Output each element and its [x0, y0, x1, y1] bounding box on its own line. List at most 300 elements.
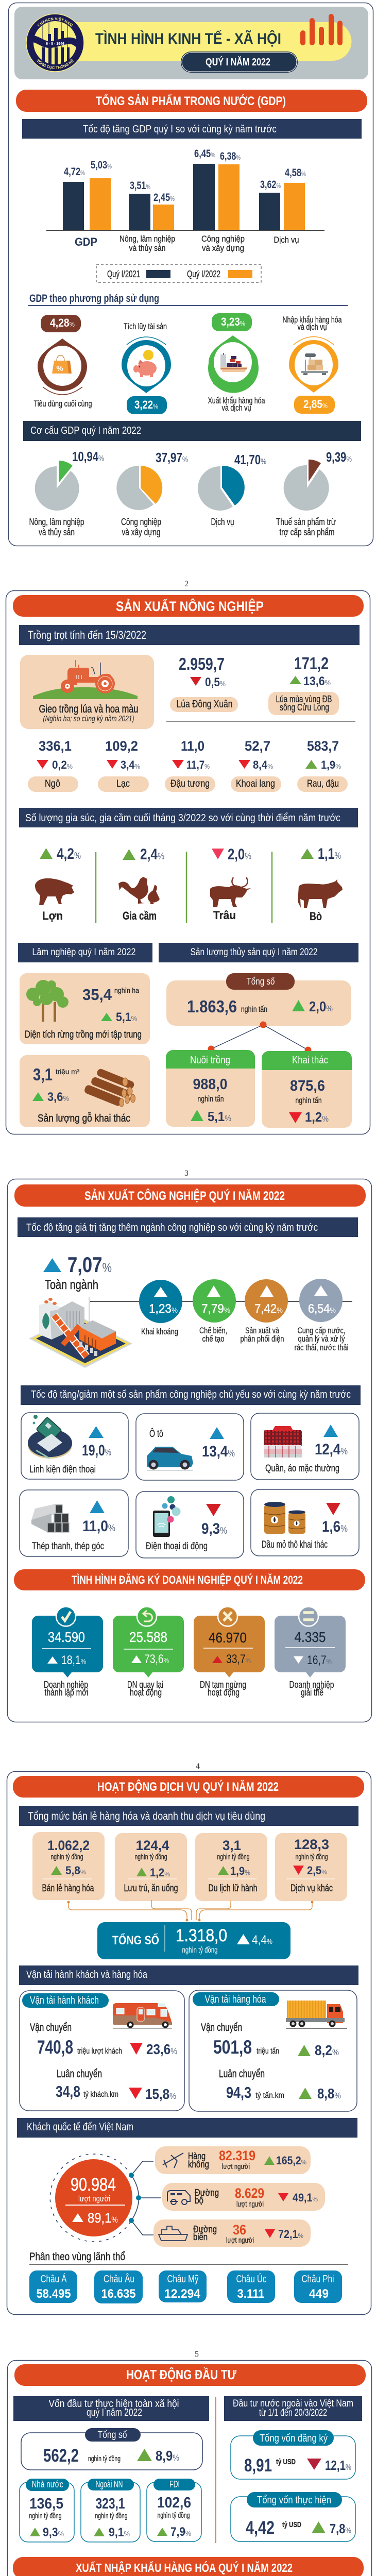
icon: oil barrels: [264, 1502, 305, 1534]
page number 5: 5: [195, 2350, 199, 2359]
pill: tổng vốn đăng ký: [253, 2430, 334, 2446]
card: nuôi trồng: nghìn tấn: [198, 1095, 224, 1104]
card: vận tải hành khách: 740,8: [37, 2037, 73, 2058]
pie: công nghiệp xây dựng 37,97%: Công nghiệp: [121, 517, 161, 527]
page number 4: 4: [196, 1762, 200, 1771]
card: châu Á: 58.495: [36, 2287, 71, 2301]
card: đường biển: [153, 2219, 311, 2247]
card: tổng số vốn đầu tư: nghìn tỷ đồng: [88, 2454, 121, 2463]
subheading: sản phẩm công nghiệp: [21, 1385, 361, 1405]
card: nuôi trồng: 988,0: [193, 1076, 228, 1093]
subheading: tốc độ tăng GDP: Tốc độ tăng GDP quý I so với cùng kỳ năm trước: [83, 124, 277, 135]
card: châu Mỹ: Châu Mỹ: [167, 2274, 199, 2285]
icon: phone components: [28, 1415, 72, 1459]
bar chart: tốc độ tăng GDP: 6,45%: [194, 148, 215, 160]
card: linh kiện điện thoại: 19,0%: [82, 1442, 111, 1459]
card: quần áo: [251, 1413, 359, 1480]
heading: hoạt động dịch vụ: HOẠT ĐỘNG DỊCH VỤ QUÝ I NĂM 2022: [97, 1780, 279, 1794]
stat: chế biến, chế tạo: 7,79%: [201, 1302, 230, 1316]
bar chart: tốc độ tăng GDP: và thủy sản: [129, 243, 166, 253]
subheading: vận tải: [19, 1965, 358, 1985]
card: tổng vốn thực hiện: tỷ USD: [282, 2520, 301, 2529]
pill: vận tải hàng hóa: Vận tải hàng hóa: [205, 1994, 266, 2005]
icon: cargo ship: [220, 353, 248, 372]
pie: thuế sản phẩm 9,39%: [276, 449, 352, 537]
card: đường hàng không: không: [188, 2159, 209, 2170]
card: doanh nghiệp giải thể: giải thể: [301, 1687, 323, 1698]
subheading: đầu tư nước ngoài: [224, 2396, 362, 2421]
card: lưu trú, ăn uống: nghìn tỷ đồng: [135, 1853, 167, 1861]
bar chart: tốc độ tăng GDP: và xây dựng: [202, 243, 244, 253]
icon: ship: [159, 2226, 187, 2241]
stat: lúa đông xuân: 0,5%: [205, 675, 226, 689]
stat: sản xuất và phân phối điện: phân phối điện: [240, 1334, 284, 1344]
card: vận tải hàng hóa: triệu tấn: [257, 2047, 279, 2056]
subheading: khách quốc tế: [17, 2118, 357, 2138]
subheading: tổng mức bán lẻ: Tổng mức bán lẻ hàng hóa và doanh thu dịch vụ tiêu dùng: [28, 1810, 265, 1822]
card: dầu mỏ: 1,6%: [322, 1518, 348, 1535]
icon: piggy bank: [133, 350, 157, 377]
pie: công nghiệp xây dựng 37,97%: 37,97%: [156, 450, 188, 465]
item: xuất khẩu hàng hóa và dịch vụ: [208, 313, 265, 413]
card: quần áo: 12,4%: [315, 1441, 348, 1458]
card: doanh nghiệp quay lại hoạt động: hoạt động: [130, 1687, 162, 1698]
card: doanh nghiệp tạm ngừng: DN tạm ngừng: [200, 1680, 246, 1690]
card: đường biển: lượt người: [226, 2236, 254, 2245]
card: doanh nghiệp giải thể: 16,7%: [307, 1653, 332, 1667]
item: nhập khẩu hàng hóa và dịch vụ: 2,85%: [303, 398, 328, 411]
card: du lịch lữ hành: Du lịch lữ hành: [208, 1883, 258, 1894]
stat: lúa mùa ĐBSCL: 13,6%: [303, 674, 331, 688]
card: rừng trồng mới: 5,1%: [116, 1010, 137, 1024]
item: xuất khẩu hàng hóa và dịch vụ: 3,23%: [221, 315, 245, 328]
card: ngoài nhà nước: nghìn tỷ đồng: [95, 2512, 128, 2520]
subheading: đầu tư nước ngoài: từ 1/1 đến 20/3/2022: [259, 2408, 327, 2418]
card: thép: [20, 1490, 128, 1556]
card: gỗ khai thác: triệu m³: [56, 1067, 79, 1076]
item: tích lũy tài sản: Tích lũy tài sản: [124, 321, 167, 331]
card: du lịch lữ hành: nghìn tỷ đồng: [217, 1853, 249, 1861]
card: du lịch lữ hành: 3,1: [223, 1838, 241, 1853]
subheading: cơ cấu GDP: [23, 421, 361, 441]
icon: shopping bag: [52, 355, 72, 374]
bar chart: tốc độ tăng GDP: 3,62%: [260, 179, 281, 191]
pie: nông lâm thủy sản 10,94%: [29, 449, 104, 537]
stat: ngô: 0,2%: [52, 758, 73, 771]
item: nhập khẩu hàng hóa và dịch vụ: Nhập khẩu hàng hóa: [282, 315, 342, 325]
header banner: [14, 7, 368, 79]
item: xuất khẩu hàng hóa và dịch vụ: Xuất khẩu hàng hóa: [208, 396, 265, 405]
icon: check mark: [62, 1612, 71, 1621]
card: dầu mỏ: [251, 1489, 359, 1556]
stat: lúa mùa ĐBSCL: 171,2: [294, 654, 329, 673]
card: du lịch lữ hành: 1,9%: [230, 1865, 250, 1877]
card: tổng vốn đăng ký: [231, 2430, 355, 2479]
card: vận tải hàng hóa: Luân chuyển: [219, 2068, 265, 2080]
card: gieo trồng: (Nghìn ha; so cùng kỳ năm 2021): [43, 715, 134, 723]
card: đường bộ: bộ: [195, 2195, 203, 2206]
chart: tổng khách quốc tế: lượt người: [78, 2194, 110, 2204]
card: đường bộ: Đường: [195, 2188, 219, 2198]
stat: lúa mùa ĐBSCL: Lúa mùa vùng ĐB: [276, 694, 332, 704]
card: linh kiện điện thoại: Linh kiện điện thoại: [29, 1464, 96, 1475]
card: vận tải hành khách: [20, 1991, 184, 2111]
card: điện thoại di động: [136, 1492, 244, 1558]
card: tổng vốn thực hiện: 7,8%: [330, 2521, 351, 2536]
card: doanh nghiệp giải thể: Doanh nghiệp: [289, 1680, 334, 1690]
subheading: vận tải: Vận tải hành khách và hàng hóa: [26, 1969, 148, 1980]
stat: cung cấp nước, xử lý rác: [295, 1279, 348, 1352]
stat: khoai lang: 52,7: [245, 738, 270, 754]
stat: bò: Bò: [310, 910, 322, 923]
icon: equals: [303, 1613, 314, 1620]
icon: mobile phone: [153, 1496, 180, 1537]
card: vận tải hàng hóa: [189, 1990, 357, 2111]
stat: chế biến, chế tạo: Chế biến,: [199, 1326, 227, 1335]
bar chart: tốc độ tăng GDP: 5,03%: [91, 159, 112, 171]
stat: lợn: 4,2%: [57, 845, 81, 862]
subheading: tốc độ tăng giá trị: Tốc độ tăng giá trị tăng thêm ngành công nghiệp so với cùng kỳ năm trước: [26, 1222, 318, 1233]
pie: nông lâm thủy sản 10,94%: và thủy sản: [39, 527, 75, 537]
card: châu Âu: Châu Âu: [104, 2273, 134, 2285]
card: gỗ khai thác: 3,6%: [47, 1090, 69, 1104]
subheading: tốc độ tăng giá trị: [18, 1217, 358, 1237]
page number 2: 2: [184, 580, 189, 588]
card: doanh nghiệp tạm ngừng: 46.970: [209, 1630, 247, 1646]
stat: toàn ngành: [43, 1252, 112, 1292]
card: khai thác: 875,6: [290, 1078, 325, 1094]
stat: rau đậu: Rau, đậu: [307, 778, 339, 789]
card: dịch vụ khác: [275, 1833, 347, 1901]
pill: vận tải hành khách: [22, 1993, 109, 2008]
card: châu Úc: Châu Úc: [236, 2273, 267, 2285]
card: quần áo: Quần, áo mặc thường: [265, 1463, 339, 1474]
stat: khai khoáng: [139, 1280, 182, 1336]
card: gieo trồng: [20, 655, 154, 729]
icon: truck: [286, 2001, 347, 2028]
item: tiêu dùng cuối cùng: 4,28%: [50, 316, 75, 329]
card: du lịch lữ hành: [195, 1833, 267, 1901]
heading: đăng ký doanh nghiệp: TÌNH HÌNH ĐĂNG KÝ DOANH NGHIỆP QUÝ I NĂM 2022: [72, 1573, 303, 1586]
stat: ngô: Ngô: [45, 778, 60, 789]
pill: vận tải hàng hóa: [193, 1992, 279, 2006]
stat: bò: [298, 845, 343, 923]
subheading: thủy sản: [159, 943, 358, 962]
card: doanh nghiệp quay lại hoạt động: 25.588: [129, 1629, 167, 1645]
stat: ngô: 336,1: [39, 738, 72, 754]
card: dịch vụ khác: Dịch vụ khác: [290, 1883, 333, 1894]
subheading: vốn đầu tư toàn xã hội: Vốn đầu tư thực hiện toàn xã hội: [48, 2398, 179, 2410]
heading: sản xuất nông nghiệp: SẢN XUẤT NÔNG NGHIỆP: [116, 598, 264, 614]
stat: cung cấp nước, xử lý rác: quản lý và xử lý: [298, 1334, 345, 1344]
title: TÌNH HÌNH KINH TẾ - XÃ HỘI: [95, 30, 281, 47]
card: doanh nghiệp quay lại hoạt động: DN quay lại: [127, 1680, 163, 1690]
card: đường bộ: 49,1%: [293, 2191, 318, 2204]
stat: toàn ngành: 7,07%: [67, 1252, 112, 1277]
card: đường biển: biển: [193, 2232, 208, 2242]
stat: lạc: [98, 738, 149, 792]
card: đường bộ: [162, 2183, 325, 2211]
card: doanh nghiệp tạm ngừng: [194, 1606, 265, 1698]
pie: nông lâm thủy sản 10,94%: Nông, lâm nghiệp: [29, 517, 84, 527]
card: gỗ khai thác: 3,1: [33, 1065, 53, 1084]
heading: hoạt động dịch vụ: [13, 1776, 364, 1798]
card: ô tô: Ô tô: [149, 1428, 163, 1439]
legend: Quý I/2022: [187, 269, 220, 279]
card: vận tải hàng hóa: Vận chuyển: [201, 2022, 242, 2033]
card: gỗ khai thác: Sản lượng gỗ khai thác: [38, 1112, 130, 1124]
card: khai thác: 1,2%: [305, 1109, 329, 1125]
card: tổng sản lượng thủy sản: 2,0%: [309, 998, 333, 1014]
card: nuôi trồng: 5,1%: [208, 1109, 231, 1124]
card: FDI: nghìn tỷ đồng: [158, 2511, 190, 2520]
subheading: khách quốc tế: Khách quốc tế đến Việt Nam: [27, 2121, 133, 2133]
icon: logs: [83, 1066, 135, 1109]
card: gieo trồng: Gieo trồng lúa và hoa màu: [39, 703, 138, 715]
bar chart: tốc độ tăng GDP: Công nghiệp: [201, 234, 245, 244]
card: tổng số vốn đầu tư: [21, 2428, 202, 2470]
panel: tổng quan GDP: [8, 2, 374, 546]
stat: lúa đông xuân: 2.959,7: [179, 654, 225, 673]
heading: GDP: TỔNG SẢN PHẨM TRONG NƯỚC (GDP): [96, 93, 286, 108]
subheading: đầu tư nước ngoài: Đầu tư nước ngoài vào Việt Nam: [233, 2398, 353, 2409]
card: đường bộ: lượt người: [236, 2200, 264, 2209]
card: ô tô: 13,4%: [202, 1443, 235, 1460]
heading: xuất nhập khẩu: [13, 2557, 364, 2576]
stat: chế biến, chế tạo: chế tạo: [202, 1334, 225, 1344]
pie: thuế sản phẩm 9,39%: Thuế sản phẩm trừ: [276, 517, 336, 527]
card: đường hàng không: lượt người: [222, 2162, 250, 2171]
card: vận tải hàng hóa: 8,2%: [315, 2042, 339, 2058]
subheading: trồng trọt: Trồng trọt tính đến 15/3/2022: [28, 629, 146, 641]
icon: return arrow: [143, 1611, 152, 1621]
heading: GDP: [16, 90, 367, 112]
card: lưu trú, ăn uống: Lưu trú, ăn uống: [124, 1883, 178, 1894]
subheading: vốn đầu tư toàn xã hội: [13, 2396, 209, 2421]
item: tiêu dùng cuối cùng: [34, 315, 92, 409]
icon: cow: [298, 879, 343, 908]
subheading: vốn đầu tư toàn xã hội: quý I năm 2022: [87, 2407, 142, 2418]
pill: vận tải hành khách: Vận tải hành khách: [30, 1995, 99, 2006]
legend: Quý I/2021: [107, 269, 140, 279]
chart: tổng khách quốc tế: 90.984: [71, 2175, 116, 2195]
card: ngoài nhà nước: [81, 2479, 140, 2542]
subheading: lâm nghiệp: Lâm nghiệp quý I năm 2022: [32, 947, 136, 958]
panel: sản xuất công nghiệp: [7, 1179, 372, 1722]
card: lưu trú, ăn uống: 1,2%: [150, 1866, 170, 1879]
card: ngoài nhà nước: 9,1%: [109, 2526, 130, 2539]
card: tổng số: [97, 1922, 290, 1959]
stat: ngô: [28, 738, 78, 792]
subheading: thủy sản: Sản lượng thủy sản quý I năm 2022: [191, 947, 317, 958]
pill: tổng số: [85, 2428, 141, 2442]
icon: trees: [26, 980, 69, 1022]
pill: tổng vốn thực hiện: Tổng vốn thực hiện: [257, 2495, 331, 2506]
card: khai thác: Khai thác: [292, 1055, 328, 1066]
page number 3: 3: [184, 1169, 189, 1178]
card: đường biển: 36: [233, 2222, 246, 2238]
card: châu Á: Châu Á: [40, 2273, 67, 2285]
stat: cung cấp nước, xử lý rác: Cung cấp nước,: [298, 1326, 345, 1335]
bar chart: tốc độ tăng GDP: 4,72%: [64, 166, 85, 178]
stat: đậu tương: 11,7%: [186, 758, 210, 771]
stat: đậu tương: 11,0: [181, 738, 204, 754]
pie: dịch vụ 41,70%: [198, 452, 266, 527]
icon: steel tubes: [31, 1504, 69, 1532]
card: tổng số: TỔNG SỐ: [112, 1933, 159, 1947]
pill: tổng vốn thực hiện: [247, 2492, 342, 2507]
stat: trâu: Trâu: [213, 909, 236, 922]
card: châu Âu: [94, 2270, 143, 2303]
item: xuất khẩu hàng hóa và dịch vụ: và dịch vụ: [221, 403, 251, 413]
card: dịch vụ khác: nghìn tỷ đồng: [296, 1853, 328, 1861]
heading: hoạt động đầu tư: HOẠT ĐỘNG ĐẦU TƯ: [126, 2367, 236, 2382]
stat: chế biến, chế tạo: [193, 1279, 236, 1344]
heading: hoạt động đầu tư: [14, 2364, 366, 2386]
card: tổng sản lượng thủy sản: nghìn tấn: [241, 1005, 267, 1014]
stat: rau đậu: 583,7: [307, 738, 339, 754]
card: doanh nghiệp tạm ngừng: hoạt động: [208, 1687, 240, 1698]
stat: sản xuất và phân phối điện: 7,42%: [254, 1302, 283, 1316]
pill: tổng số: [226, 973, 295, 990]
card: rừng trồng mới: nghìn ha: [114, 986, 139, 994]
stat: lợn: Lợn: [42, 909, 63, 922]
card: doanh nghiệp thành lập mới: thành lập mới: [44, 1687, 89, 1698]
pie: thuế sản phẩm 9,39%: 9,39%: [326, 449, 352, 465]
card: điện thoại di động: Điện thoại di động: [146, 1541, 208, 1552]
card: thép: 11,0%: [82, 1518, 115, 1535]
card: vận tải hành khách: Luân chuyển: [57, 2068, 102, 2080]
stat: khoai lang: Khoai lang: [236, 778, 275, 789]
card: doanh nghiệp giải thể: 4.335: [295, 1629, 326, 1645]
stat: khoai lang: 8,4%: [253, 758, 273, 771]
stat: cung cấp nước, xử lý rác: rác thải, nước thải: [295, 1343, 348, 1352]
card: linh kiện điện thoại: [21, 1413, 128, 1479]
card: thép: Thép thanh, thép góc: [32, 1541, 104, 1552]
pie: dịch vụ 41,70%: 41,70%: [234, 452, 266, 467]
bar chart: tốc độ tăng GDP: 2,45%: [153, 192, 175, 204]
card: doanh nghiệp thành lập mới: 34.590: [48, 1629, 85, 1645]
card: tổng vốn thực hiện: 4,42: [246, 2518, 275, 2538]
card: châu Á: [29, 2270, 77, 2303]
subheading: tổng mức bán lẻ: [19, 1806, 358, 1826]
icon: airplane: [163, 2153, 183, 2168]
card: châu Phi: Châu Phi: [302, 2274, 334, 2285]
icon: rooster and duck: [118, 877, 160, 904]
period pill: [181, 52, 298, 73]
logo: Tổng cục Thống kê: 6 - 5 - 1946: [46, 42, 64, 46]
stat: lúa mùa ĐBSCL: sông Cửu Long: [280, 702, 329, 713]
icon: van: [167, 2191, 190, 2205]
card: tổng vốn đăng ký: 8,91: [244, 2455, 272, 2476]
card: đường biển: 72,1%: [278, 2228, 303, 2241]
card: bán lẻ hàng hóa: Bán lẻ hàng hóa: [42, 1883, 94, 1894]
logo: Tổng cục Thống kê: CHXHCN VIỆT NAM: [38, 17, 73, 27]
card: nhà nước: 9,3%: [43, 2526, 64, 2539]
card: điện thoại di động: 9,3%: [201, 1520, 227, 1537]
card: khai thác: nghìn tấn: [296, 1096, 321, 1105]
card: châu Phi: 449: [309, 2287, 329, 2301]
card: vận tải hành khách: 15,8%: [145, 2086, 176, 2102]
card: tổng số: 4,4%: [252, 1933, 272, 1947]
bar chart: tốc độ tăng GDP: 3,51%: [130, 180, 150, 192]
stat: khoai lang: [231, 738, 281, 792]
card: đường hàng không: [155, 2146, 311, 2174]
period pill: QUÝ I NĂM 2022: [206, 56, 270, 68]
pie: thuế sản phẩm 9,39%: trợ cấp sản phẩm: [279, 527, 335, 537]
legend: [96, 264, 261, 282]
bar chart: tốc độ tăng GDP: 4,58%: [285, 167, 306, 179]
pill: tổng số: Tổng số: [246, 976, 275, 987]
pie: nông lâm thủy sản 10,94%: 10,94%: [72, 449, 104, 464]
card: tổng số vốn đầu tư: 8,9%: [156, 2448, 179, 2464]
heading: đăng ký doanh nghiệp: [14, 1569, 365, 1590]
stat: trâu: [210, 846, 251, 922]
card: FDI: 102,6: [157, 2495, 191, 2511]
card: gỗ khai thác: [20, 1055, 150, 1127]
stat: lợn: [35, 845, 81, 922]
bar chart: tốc độ tăng GDP: [46, 148, 324, 253]
stat: lạc: 3,4%: [121, 758, 140, 771]
icon: folded shirts: [264, 1426, 302, 1458]
card: nuôi trồng: [166, 1050, 255, 1127]
bar chart: tốc độ tăng GDP: Dịch vụ: [274, 235, 299, 245]
connector: các nhóm tới tổng số: [67, 1900, 313, 1922]
card: vận tải hàng hóa: 94,3: [226, 2083, 251, 2102]
card: dịch vụ khác: 128,3: [294, 1837, 329, 1852]
card: vận tải hàng hóa: 501,8: [213, 2037, 252, 2058]
card: ngoài nhà nước: 323,1: [96, 2496, 125, 2512]
subheading: gia súc gia cầm: [19, 808, 358, 827]
pill: tổng số: Tổng số: [98, 2430, 127, 2441]
card: nhà nước: 136,5: [29, 2496, 63, 2512]
stat: toàn ngành: Toàn ngành: [45, 1278, 98, 1292]
card: tổng sản lượng thủy sản: 1.863,6: [187, 997, 237, 1016]
card: nuôi trồng: Nuôi trồng: [190, 1055, 230, 1066]
card: bán lẻ hàng hóa: 5,8%: [65, 1864, 86, 1877]
card: bán lẻ hàng hóa: nghìn tỷ đồng: [50, 1853, 83, 1861]
card: FDI: [147, 2479, 201, 2541]
card: dịch vụ khác: 2,5%: [307, 1864, 327, 1877]
stat: sản xuất và phân phối điện: Sản xuất và: [245, 1326, 279, 1335]
card: tổng số: 1.318,0: [176, 1926, 227, 1945]
card: tổng số vốn đầu tư: 562,2: [43, 2446, 79, 2466]
card: đường hàng không: Hàng: [188, 2151, 206, 2161]
card: đường bộ: 8.629: [235, 2185, 264, 2201]
item: tích lũy tài sản: [122, 321, 171, 414]
heading: sản xuất nông nghiệp: [13, 595, 364, 617]
card: châu Mỹ: 12.294: [164, 2287, 201, 2301]
card: châu Phi: [294, 2270, 342, 2303]
card: vận tải hành khách: tỷ khách.km: [83, 2090, 118, 2099]
heading: sản xuất công nghiệp: [14, 1184, 366, 1207]
icon: cross: [224, 1612, 232, 1621]
card: rừng trồng mới: [20, 973, 150, 1044]
card: tổng sản lượng thủy sản: [166, 973, 351, 1026]
stat: lạc: 109,2: [105, 738, 138, 754]
card: doanh nghiệp quay lại hoạt động: 73,6%: [144, 1652, 169, 1666]
stat: gia cầm: [118, 846, 164, 922]
icon: car: [147, 1447, 193, 1470]
pill: nhà nước: Nhà nước: [32, 2479, 63, 2489]
subheading: cơ cấu GDP: Cơ cấu GDP quý I năm 2022: [30, 425, 141, 436]
card: vận tải hành khách: 23,6%: [146, 2041, 177, 2057]
icon: factory: [29, 1297, 132, 1368]
card: nhà nước: nghìn tỷ đồng: [29, 2512, 62, 2520]
stat: bò: 1,1%: [318, 845, 341, 862]
bar chart: tốc độ tăng GDP: GDP: [75, 235, 97, 248]
icon: shopping bag: %: [56, 364, 63, 373]
